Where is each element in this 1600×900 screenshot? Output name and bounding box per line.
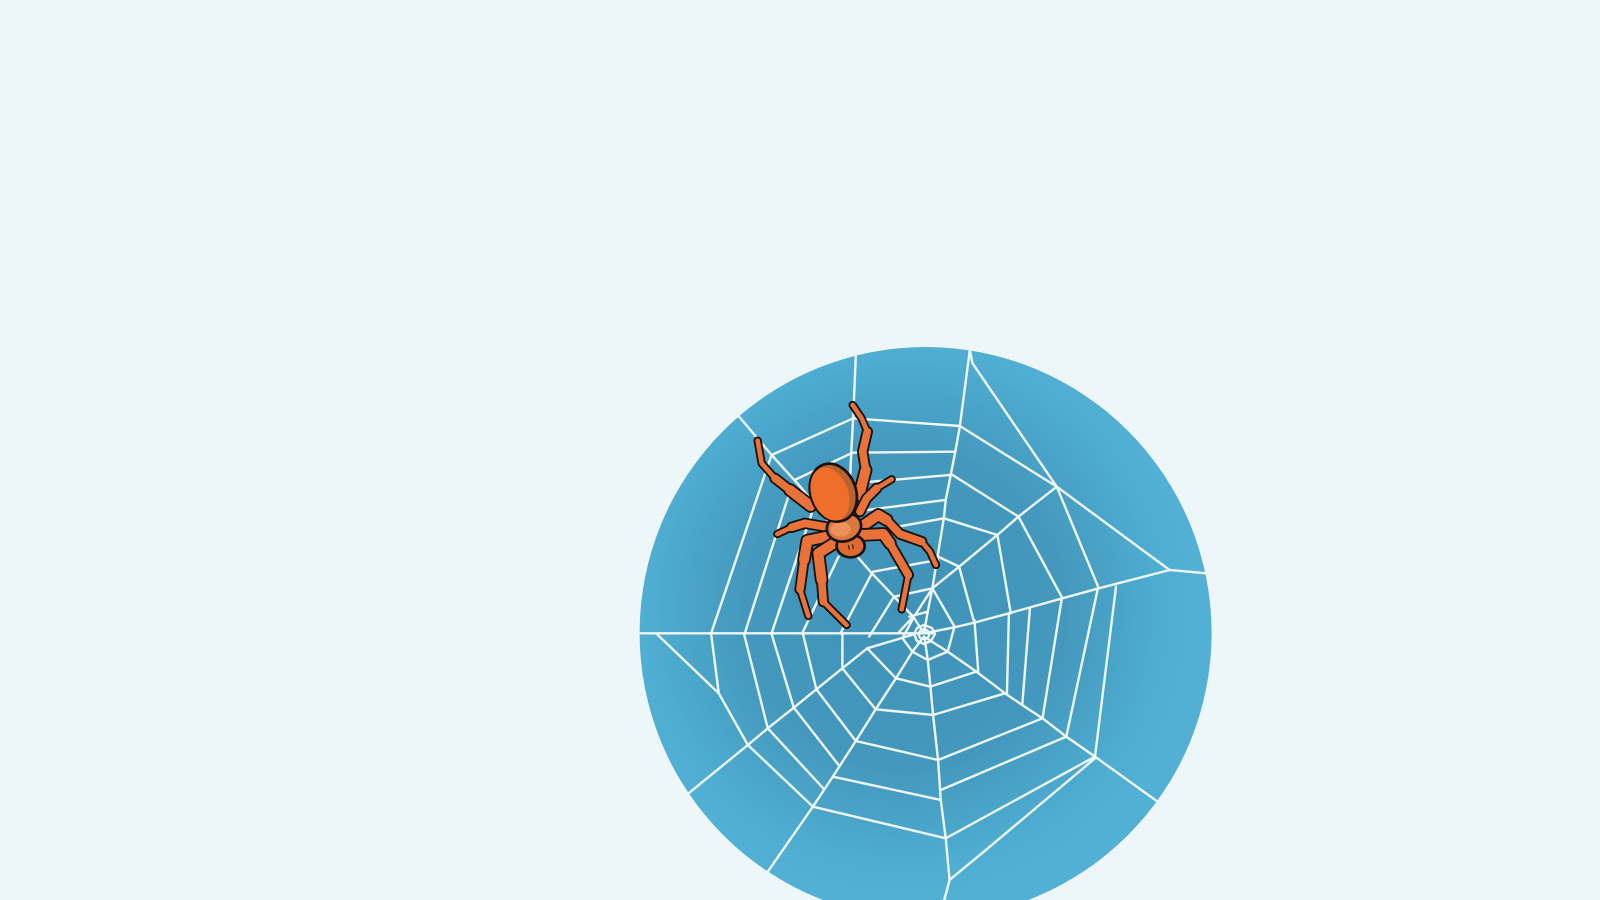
blue circle: [640, 347, 1212, 900]
abdomen: [802, 457, 865, 528]
head: [837, 535, 865, 557]
web: upper half: [634, 347, 1206, 637]
leg: short right: [860, 479, 892, 512]
leg: short left: [777, 523, 828, 534]
leg: lower middle: [818, 542, 847, 625]
cephalothorax: [824, 509, 864, 545]
spider: [758, 405, 936, 625]
leg: upper back left: [758, 441, 811, 506]
leg: lower left: [800, 536, 830, 616]
web: central hub: [914, 625, 935, 644]
leg: upper front: [853, 405, 867, 495]
web: lower half: [657, 587, 1156, 900]
leg: lower right: [862, 534, 908, 609]
spider web: [634, 347, 1206, 900]
leg: long right: [862, 515, 936, 565]
